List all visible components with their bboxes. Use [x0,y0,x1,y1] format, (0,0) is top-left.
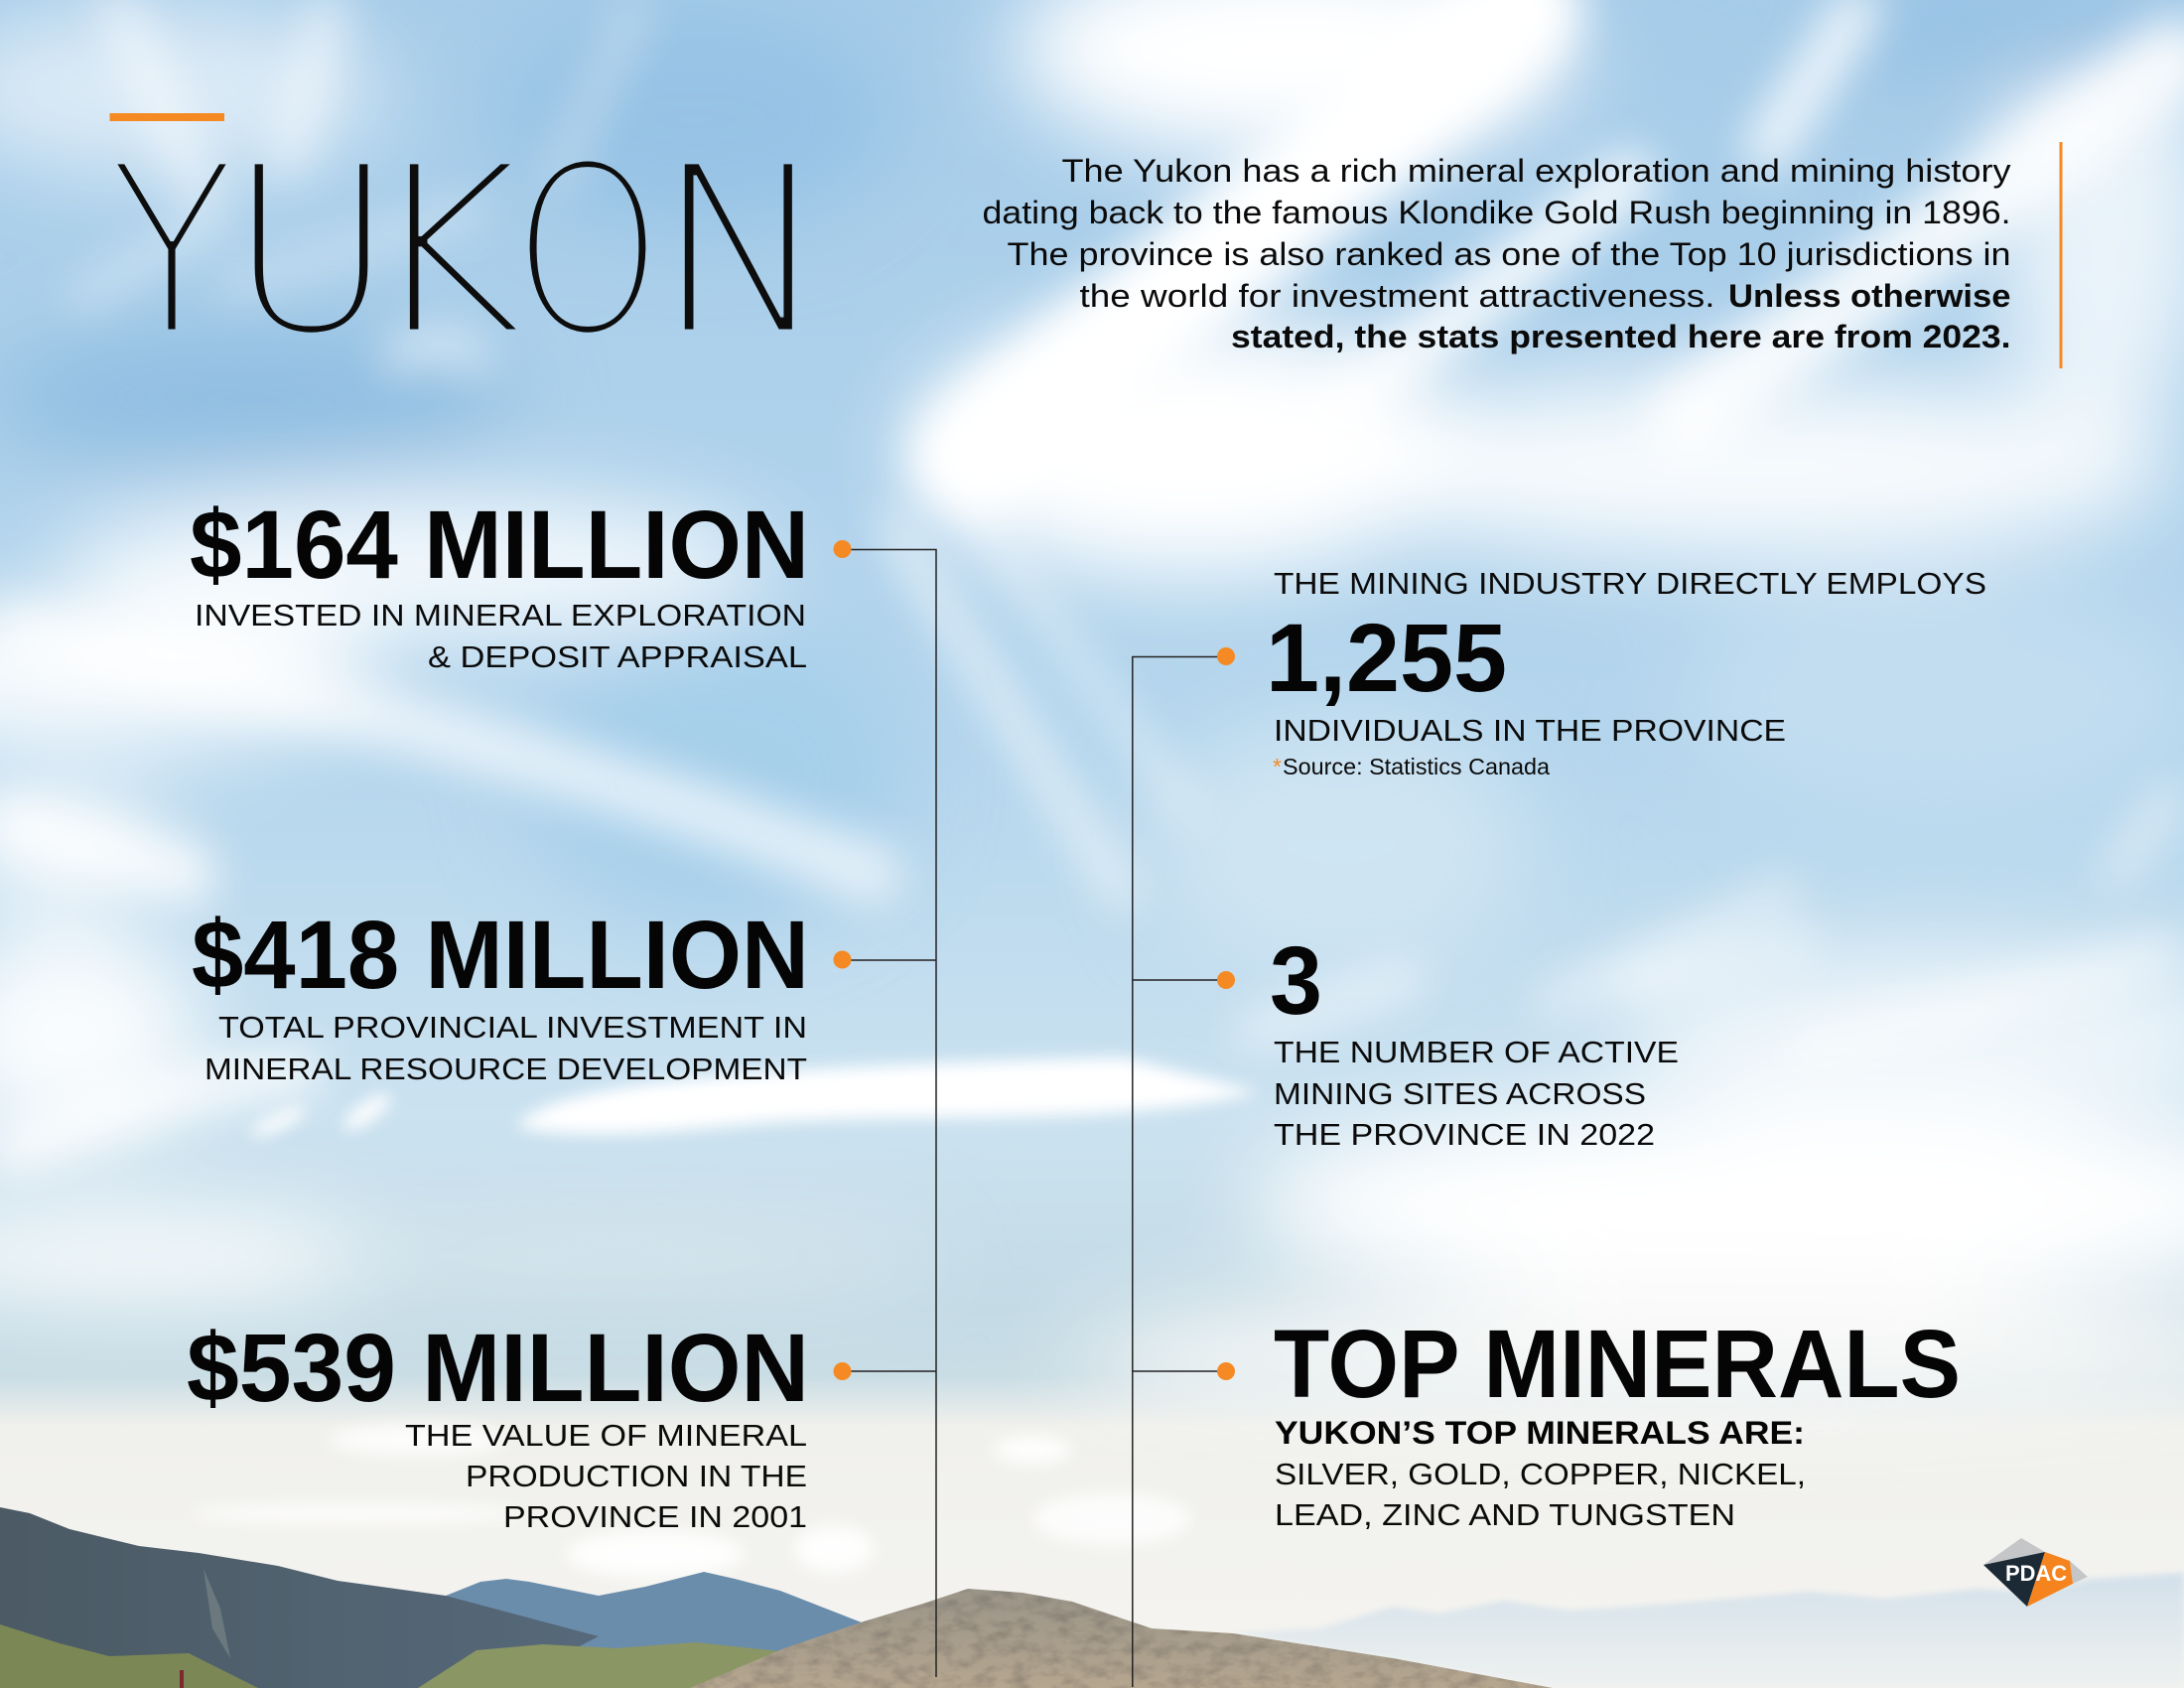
stat: $164 million: INVESTED IN MINERAL EXPLORATION [195,598,806,633]
left mountains [0,1507,867,1688]
wispy cirrus streaks [10,10,2174,1152]
title: YUKON: O [512,117,663,385]
orange vertical rule [2059,142,2063,368]
stat: 1,255 employed: Source: Statistics Canada [1283,754,1551,779]
stat: $418 million: $418 MILLION [192,901,809,1009]
title: YUKON [110,117,829,385]
stat: 3 active mining sites: MINING SITES ACROSS [1274,1076,1646,1111]
right connector line [1133,657,1226,1687]
intro text: dating back to the famous Klondike Gold Rush beginning in 1896. [983,195,2011,230]
intro text [983,153,2011,354]
stat: $539 million: THE VALUE OF MINERAL [405,1418,807,1453]
stat: top minerals [1217,1310,1961,1532]
stat: 1,255 employed [1217,566,1986,779]
orange accent bar [109,113,224,121]
title: YUKON: N [655,117,829,385]
centre mountain [690,1589,1553,1688]
stat: 3 active mining sites: THE NUMBER OF ACTIVE [1274,1035,1679,1069]
stat: 3 active mining sites [1217,926,1679,1152]
logo: PDAC: PDAC [2005,1561,2067,1586]
stat: 1,255 employed: 1,255 [1266,604,1507,712]
stat: top minerals: YUKON’S TOP MINERALS ARE: [1275,1415,1805,1451]
stat: 3 active mining sites: THE PROVINCE IN 2022 [1274,1117,1655,1152]
stat: top minerals: LEAD, ZINC AND TUNGSTEN [1275,1497,1735,1532]
stat: $164 million: & DEPOSIT APPRAISAL [428,639,807,674]
left connector line [843,550,936,1677]
stat: $164 million [190,491,852,674]
title: YUKON: Y [110,117,234,385]
stat: top minerals: TOP MINERALS [1274,1310,1961,1418]
stat: $418 million [192,901,852,1086]
intro text: stated, the stats presented here are from 2023. [1231,319,2011,354]
title: YUKON: U [228,117,395,385]
stat: $539 million: PRODUCTION IN THE [466,1459,807,1493]
stat: $418 million: TOTAL PROVINCIAL INVESTMENT IN [218,1010,807,1045]
stat: top minerals: SILVER, GOLD, COPPER, NICKEL, [1275,1457,1806,1491]
stat: 3 active mining sites: 3 [1270,926,1322,1035]
logo: PDAC [1983,1538,2088,1607]
stat: $539 million: $539 MILLION [187,1314,809,1422]
stat: $418 million: MINERAL RESOURCE DEVELOPMENT [205,1052,807,1086]
stat: 1,255 employed: INDIVIDUALS IN THE PROVINCE [1274,713,1786,748]
intro text: The province is also ranked as one of the Top 10 jurisdictions in [1007,236,2011,272]
stat: $539 million [187,1314,852,1534]
stat: 1,255 employed: THE MINING INDUSTRY DIRECTLY EMPLOYS [1274,566,1986,601]
intro text: Unless otherwise [1728,278,2011,314]
title: YUKON: K [367,117,523,385]
intro text: the world for investment attractiveness. [1080,278,1715,314]
stat: $164 million: $164 MILLION [190,491,809,599]
stat: $539 million: PROVINCE IN 2001 [503,1499,807,1534]
intro text: The Yukon has a rich mineral exploration and mining history [1062,153,2011,189]
stat: 1,255 employed: * [1273,754,1282,779]
far mountains [1233,1573,2184,1688]
